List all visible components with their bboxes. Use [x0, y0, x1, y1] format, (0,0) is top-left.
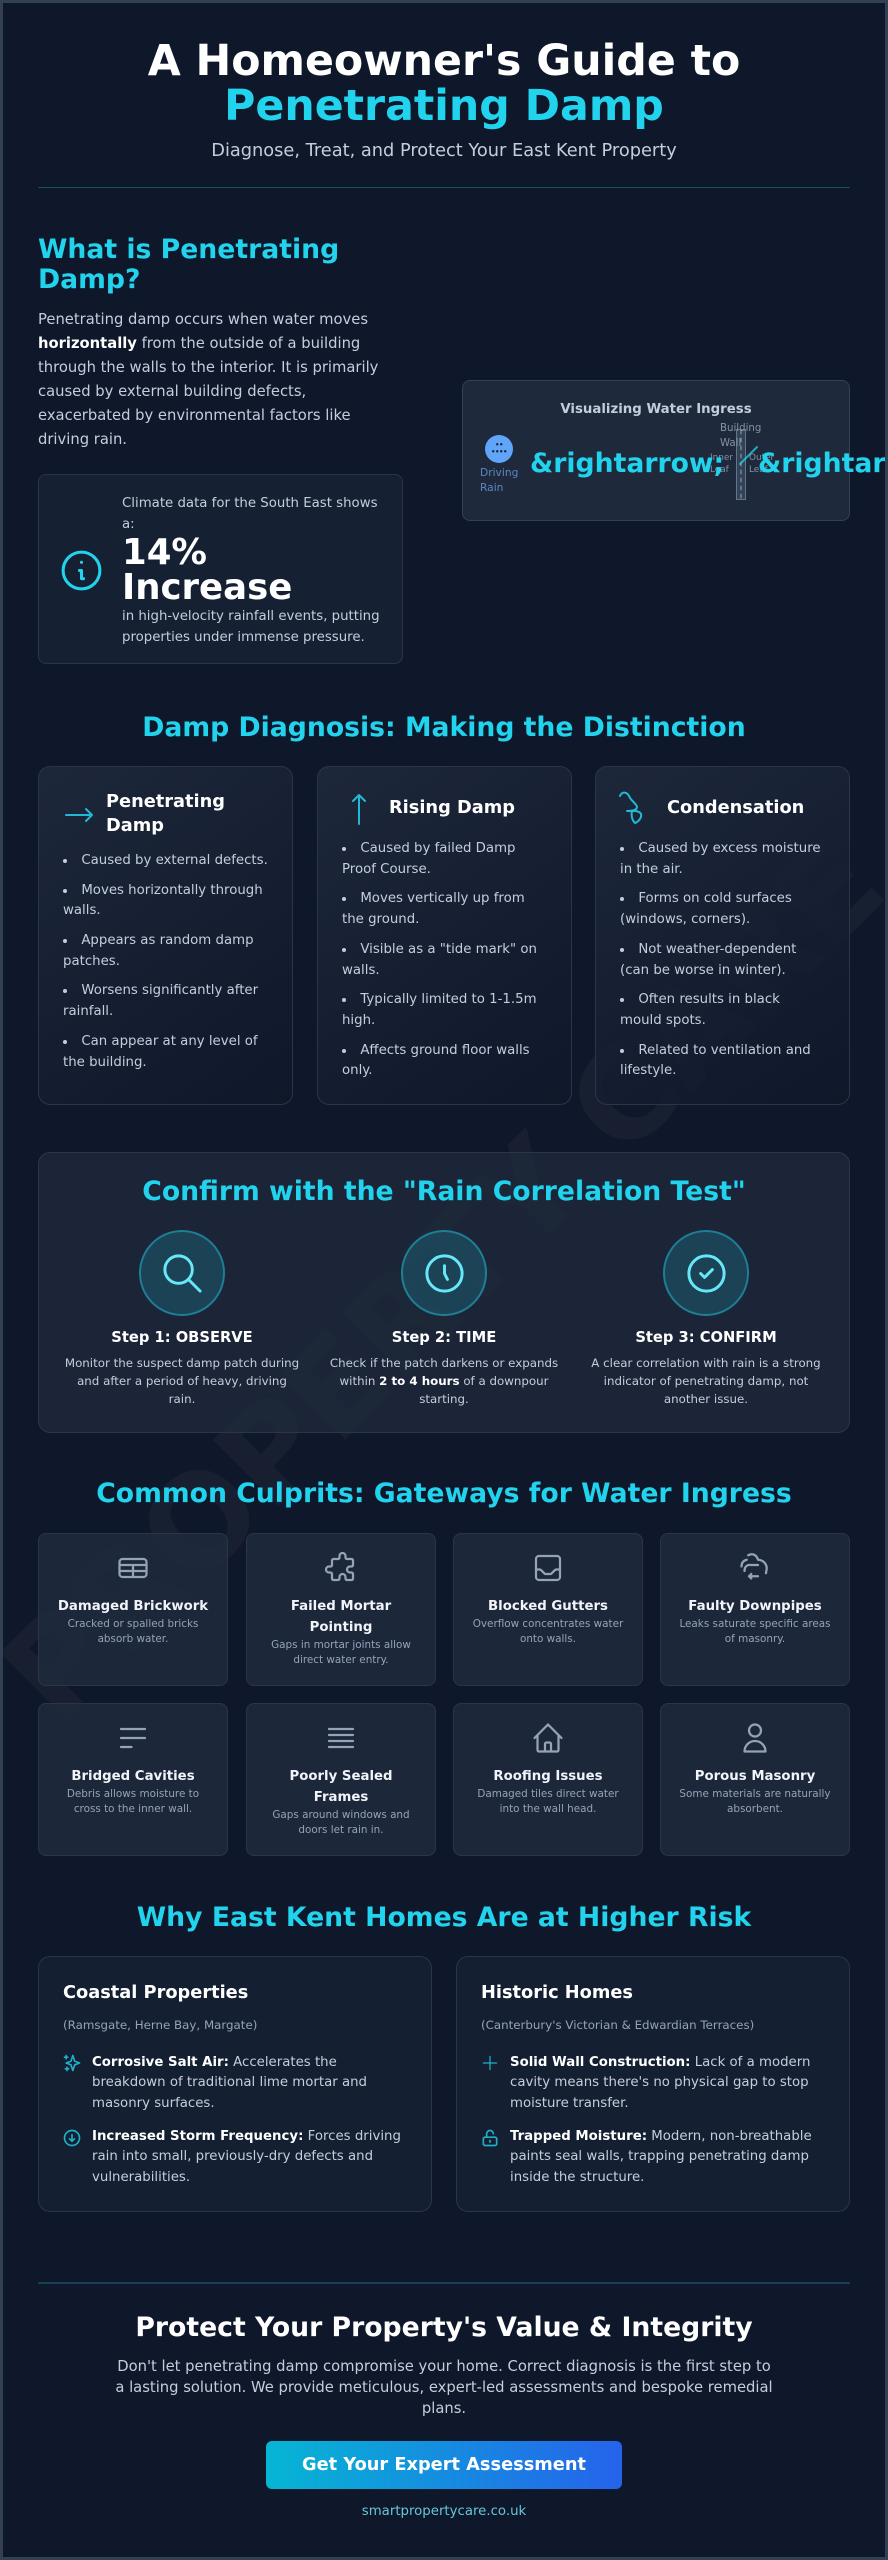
- label: outer leaf: Leaf: [749, 465, 768, 475]
- description: Damaged tiles direct water: [477, 1788, 619, 1800]
- subtitle: Diagnose, Treat, and Protect Your East Kent Property: [211, 140, 677, 161]
- footer text: a lasting solution. We provide meticulous, expert-led assessments and bespoke remedial: [115, 2379, 773, 2396]
- panel title: Visualizing Water Ingress: [560, 402, 752, 417]
- step text: [591, 1356, 821, 1406]
- list: high.: [342, 1013, 375, 1028]
- heading: higher risk: Why East Kent Homes Are at Higher Risk: [137, 1902, 751, 1933]
- risk: salt air: breakdown of traditional lime mortar and: [92, 2075, 367, 2090]
- description: onto walls.: [520, 1633, 576, 1645]
- icon: house: [533, 1723, 563, 1753]
- label: building wall: Wall: [720, 438, 741, 449]
- icon: info: [62, 550, 102, 590]
- list: Visible as a "tide mark" on: [360, 942, 537, 957]
- heading: common culprits: Common Culprits: Gateways for Water Ingress: [96, 1478, 792, 1509]
- list: lifestyle.: [620, 1063, 676, 1078]
- card title: Penetrating: [106, 791, 225, 812]
- statistic text: Climate data for the South East shows: [122, 496, 378, 510]
- list: Often results in black: [638, 992, 780, 1007]
- card title: Rising Damp: [389, 797, 515, 818]
- culprit: roofing issues: [453, 1703, 643, 1856]
- label: driving rain: [480, 466, 518, 494]
- description: absorbent.: [727, 1803, 783, 1815]
- heading: damp diagnosis: Damp Diagnosis: Making the Distinction: [142, 712, 746, 743]
- heading: What is Penetrating: [38, 234, 339, 265]
- description: Gaps in mortar joints allow: [271, 1639, 411, 1651]
- panel: visualizing water ingress: [462, 380, 850, 521]
- step title: Step 2: TIME: [392, 1329, 496, 1346]
- title: [291, 1599, 392, 1635]
- risk: storms: vulnerabilities.: [92, 2170, 190, 2185]
- description: Gaps around windows and: [272, 1809, 410, 1821]
- label: inner leaf: [710, 453, 733, 475]
- heading: Confirm with the "Rain Correlation Test": [142, 1176, 746, 1207]
- card: rising damp: [317, 766, 572, 1105]
- title: Pointing: [310, 1620, 372, 1635]
- heading: Damp?: [38, 264, 140, 295]
- culprit: blocked gutters: [453, 1533, 643, 1686]
- list: walls.: [63, 903, 101, 918]
- card title: [106, 791, 225, 836]
- title: Penetrating Damp: [224, 81, 664, 131]
- panel title: Coastal Properties: [63, 1982, 248, 2003]
- step text: rain.: [169, 1392, 195, 1406]
- culprit: bridged cavities: [38, 1703, 228, 1856]
- description: Overflow concentrates water: [473, 1618, 623, 1630]
- list: mould spots.: [620, 1013, 706, 1028]
- statistic text: a:: [122, 516, 135, 532]
- description: [473, 1618, 624, 1645]
- panel: rain correlation test: [38, 1152, 850, 1433]
- step text: [330, 1356, 558, 1406]
- title: A Homeowner's Guide to: [148, 36, 740, 86]
- title: Faulty Downpipes: [688, 1599, 822, 1614]
- icon: plus: [480, 2053, 500, 2073]
- risk: storms: rain into small, previously-dry defects and: [92, 2149, 373, 2164]
- label: inner leaf: Leaf: [710, 465, 729, 475]
- panel: coastal properties: [38, 1956, 432, 2212]
- list: [620, 841, 821, 1078]
- list: (windows, corners).: [620, 912, 750, 927]
- description: [67, 1788, 199, 1815]
- title: Poorly Sealed: [289, 1769, 393, 1784]
- locations: (Ramsgate, Herne Bay, Margate): [63, 2018, 257, 2032]
- description: Cracked or spalled bricks: [68, 1618, 198, 1630]
- list: rainfall.: [63, 1004, 113, 1019]
- icon: short lines: [120, 1728, 146, 1748]
- list: Moves vertically up from: [360, 891, 525, 906]
- list: Affects ground floor walls: [360, 1043, 530, 1058]
- title: Damaged Brickwork: [58, 1599, 208, 1614]
- title: Failed Mortar: [291, 1599, 391, 1614]
- card title: Damp: [106, 815, 164, 836]
- icon: person: [737, 1720, 773, 1756]
- risk: solid wall: [510, 2052, 810, 2115]
- footer text: [38, 2356, 850, 2419]
- step text: within 2 to 4 hours of a downpour: [339, 1374, 549, 1388]
- locations: (Canterbury's Victorian & Edwardian Terraces): [481, 2018, 754, 2032]
- label: outer leaf: Outer: [749, 453, 774, 463]
- icon: puzzle: [324, 1552, 354, 1582]
- description: [68, 1618, 198, 1645]
- list: patches.: [63, 954, 120, 969]
- definition text: through the walls to the interior. It is primarily: [38, 358, 378, 376]
- step 2: [330, 1230, 558, 1406]
- icon: vertical arrow: [352, 794, 366, 825]
- list: [63, 853, 268, 1070]
- card: condensation: [595, 766, 850, 1105]
- list: the ground.: [342, 912, 419, 927]
- list: Related to ventilation and: [638, 1043, 811, 1058]
- list: (can be worse in winter).: [620, 963, 786, 978]
- description: doors let rain in.: [298, 1824, 384, 1836]
- icon: condensation swirl: [619, 792, 642, 824]
- icon: arrow circle down: [62, 2128, 82, 2148]
- culprit: porous masonry: [660, 1703, 850, 1856]
- step title: Step 1: OBSERVE: [111, 1329, 253, 1346]
- list: Worsens significantly after: [81, 983, 258, 998]
- list: [342, 841, 537, 1078]
- label: driving rain: Rain: [480, 481, 503, 494]
- statistic text: [122, 496, 380, 644]
- culprit: poorly sealed frames: [246, 1703, 436, 1856]
- risk: trapped moisture: [510, 2126, 812, 2189]
- wall diagram: [736, 429, 746, 500]
- description: cross to the inner wall.: [74, 1803, 192, 1815]
- icon: downpipe: [740, 1553, 768, 1580]
- risk: trapped moisture: paints seal walls, trapping penetrating damp: [510, 2149, 809, 2164]
- footer text: Don't let penetrating damp compromise your home. Correct diagnosis is the first step to: [117, 2358, 771, 2375]
- description: of masonry.: [725, 1633, 785, 1645]
- risk: salt air: Corrosive Salt Air: Accelerates the: [92, 2054, 337, 2070]
- description: into the wall head.: [500, 1803, 596, 1815]
- title: [148, 36, 740, 131]
- step 1: [65, 1230, 299, 1406]
- description: [272, 1809, 410, 1836]
- risk: solid wall: Solid Wall Construction: Lack of a modern: [510, 2054, 810, 2070]
- heading: [38, 234, 339, 295]
- definition text: [38, 310, 378, 448]
- definition text: Penetrating damp occurs when water moves: [38, 310, 368, 328]
- title: Frames: [314, 1790, 368, 1805]
- title: Blocked Gutters: [488, 1599, 608, 1614]
- icon: driving rain: ••••: [491, 448, 507, 456]
- list: Forms on cold surfaces: [638, 891, 792, 906]
- risk: salt air: masonry surfaces.: [92, 2096, 215, 2111]
- culprit: faulty downpipes: [660, 1533, 850, 1686]
- list: Proof Course.: [342, 862, 431, 877]
- label: building wall: Building: [720, 423, 761, 434]
- risk: trapped moisture: inside the structure.: [510, 2170, 644, 2185]
- footer call to action: [38, 2300, 850, 2530]
- risk: solid wall: cavity means there's no physical gap to stop: [510, 2075, 809, 2090]
- list: Moves horizontally through: [81, 883, 263, 898]
- icon: bricks: [118, 1558, 148, 1578]
- icon: sparkles: [62, 2053, 82, 2073]
- description: Some materials are naturally: [679, 1788, 831, 1800]
- description: [661, 1787, 849, 1817]
- title: [289, 1769, 393, 1805]
- step text: Monitor the suspect damp patch during: [65, 1356, 299, 1370]
- step text: Check if the patch darkens or expands: [330, 1356, 558, 1370]
- icon: open lock: [480, 2128, 500, 2148]
- list: the building.: [63, 1055, 147, 1070]
- icon: driving rain: ••: [495, 441, 503, 449]
- description: direct water entry.: [293, 1654, 389, 1666]
- description: Debris allows moisture to: [67, 1788, 199, 1800]
- step text: indicator of penetrating damp, not: [604, 1374, 808, 1388]
- label: building wall: [720, 423, 761, 449]
- arrow: water path: [739, 430, 758, 498]
- list: in the air.: [620, 862, 683, 877]
- list: Appears as random damp: [81, 933, 254, 948]
- step text: A clear correlation with rain is a strong: [591, 1356, 821, 1370]
- icon: lines: [328, 1728, 354, 1748]
- list: Not weather-dependent: [638, 942, 796, 957]
- callout: climate statistic: [38, 474, 403, 664]
- description: Leaks saturate specific areas: [679, 1618, 831, 1630]
- title: Bridged Cavities: [71, 1769, 195, 1784]
- website link: smartpropertycare.co.uk: [362, 2504, 526, 2519]
- step 3: [591, 1230, 821, 1406]
- panel title: Historic Homes: [481, 1982, 633, 2003]
- footer heading: Protect Your Property's Value & Integrity: [135, 2312, 753, 2343]
- description: [679, 1618, 831, 1645]
- list: Caused by external defects.: [81, 853, 268, 868]
- definition text: horizontally from the outside of a building: [38, 334, 360, 352]
- button: Get Your Expert Assessment: [302, 2454, 586, 2475]
- culprit: damaged brickwork: [38, 1533, 228, 1686]
- title: Porous Masonry: [695, 1769, 815, 1784]
- step text: another issue.: [664, 1392, 748, 1406]
- definition text: caused by external building defects,: [38, 382, 306, 400]
- list: Can appear at any level of: [81, 1034, 258, 1049]
- footer text: plans.: [422, 2400, 466, 2417]
- description: [271, 1639, 411, 1666]
- icon: clock: [401, 1230, 487, 1316]
- title: Roofing Issues: [493, 1769, 603, 1784]
- statistic text: Increase: [122, 567, 292, 608]
- card: penetrating damp: [38, 766, 293, 1105]
- icon: magnifier: [139, 1230, 225, 1316]
- description: absorb water.: [98, 1633, 168, 1645]
- icon: check circle: [663, 1230, 749, 1316]
- list: only.: [342, 1063, 372, 1078]
- list: Caused by failed Damp: [360, 841, 516, 856]
- header: [148, 36, 740, 161]
- card title: Condensation: [667, 797, 804, 818]
- panel: historic homes: [456, 1956, 850, 2212]
- statistic text: properties under immense pressure.: [122, 630, 365, 644]
- list: Typically limited to 1-1.5m: [360, 992, 537, 1007]
- statistic text: in high-velocity rainfall events, putting: [122, 608, 380, 624]
- icon: gutter tray: [534, 1554, 562, 1582]
- risk: salt air: [92, 2052, 367, 2115]
- statistic text: 14%: [122, 532, 207, 573]
- culprit: failed mortar pointing: [246, 1533, 436, 1686]
- step text: [65, 1356, 299, 1406]
- icon: horizontal arrow: [65, 808, 93, 822]
- label: outer leaf: [749, 453, 774, 475]
- risk: storms: [92, 2126, 401, 2189]
- icon: driving rain: [485, 435, 513, 463]
- risk: storms: Increased Storm Frequency: Forces driving: [92, 2128, 401, 2144]
- definition text: exacerbated by environmental factors like: [38, 406, 351, 424]
- risk: solid wall: moisture transfer.: [510, 2096, 629, 2111]
- step text: starting.: [419, 1392, 469, 1406]
- description: [454, 1787, 642, 1817]
- section: what is penetrating damp: [38, 234, 403, 664]
- step text: and after a period of heavy, driving: [77, 1374, 287, 1388]
- label: inner leaf: Inner: [710, 453, 733, 463]
- label: driving rain: Driving: [480, 466, 518, 479]
- step title: Step 3: CONFIRM: [635, 1329, 777, 1346]
- button: [266, 2441, 622, 2489]
- list: Caused by excess moisture: [638, 841, 821, 856]
- risk: trapped moisture: Trapped Moisture: Modern, non-breathable: [510, 2128, 812, 2144]
- definition text: driving rain.: [38, 430, 127, 448]
- list: walls.: [342, 963, 380, 978]
- broken arrow text: &rightarrow;: [530, 448, 724, 479]
